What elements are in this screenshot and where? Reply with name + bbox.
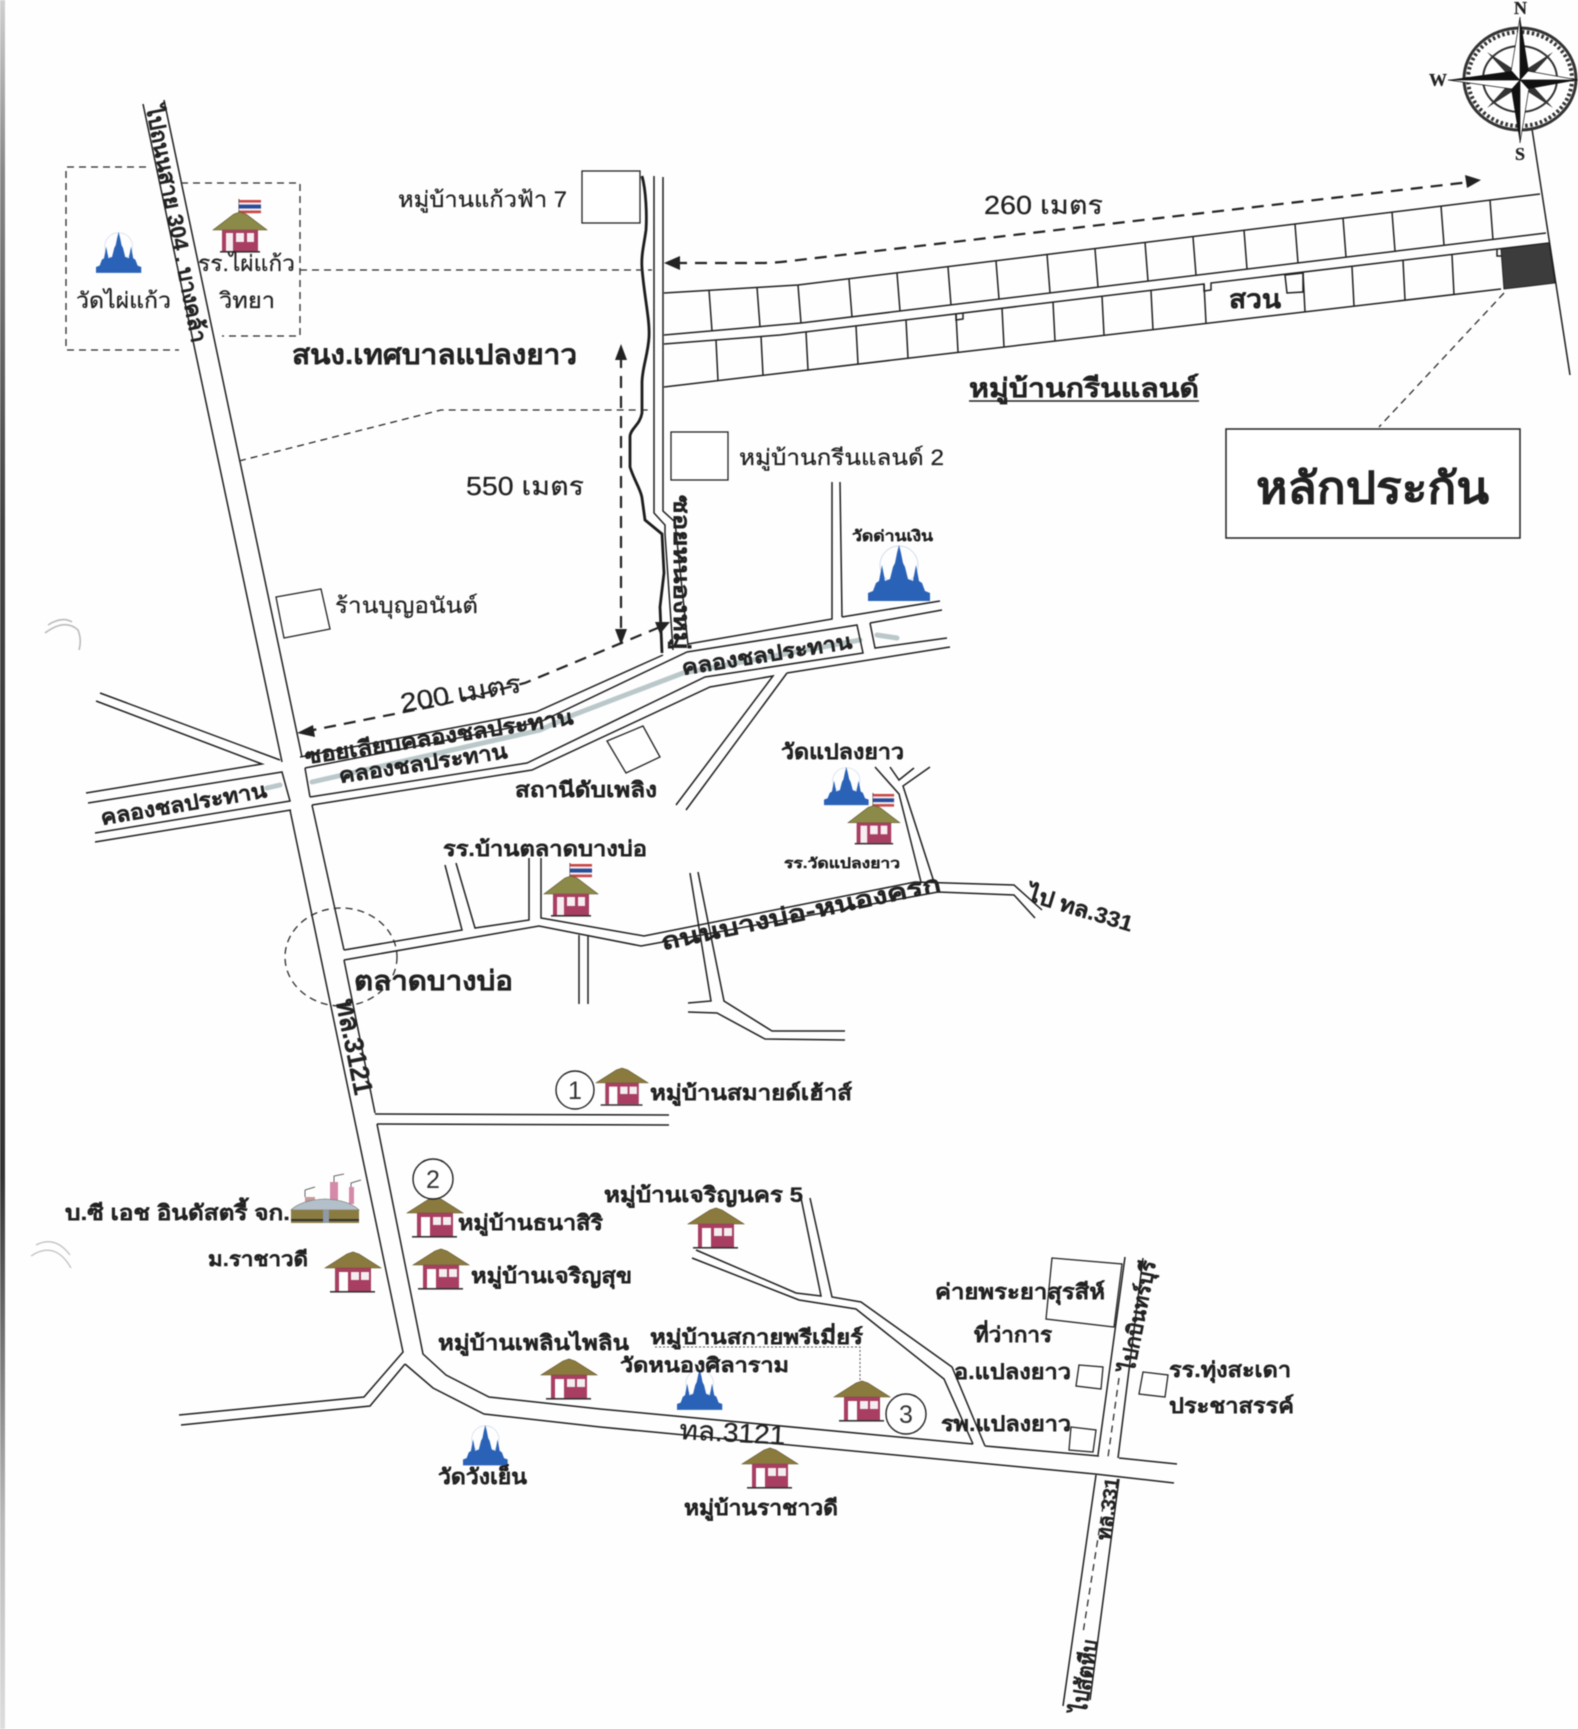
label: lower section: ประชาสรรค์: [1169, 1394, 1294, 1418]
label: canal and market section: รร.วัดแปลงยาว: [784, 855, 900, 871]
stream: [630, 176, 664, 653]
label: canal and market section: สถานีดับเพลิง: [515, 778, 657, 802]
label: canal and market section: ทล.3121: [330, 996, 379, 1097]
label: canal and market section: รร.บ้านตลาดบางบ่อ: [443, 837, 647, 861]
label: canal and market section: ตลาดบางบ่อ: [354, 966, 513, 996]
label: lower section: หมู่บ้านธนาสิริ: [458, 1211, 604, 1237]
numbered markers: 2: [426, 1166, 440, 1194]
arrow: 260 metres: [664, 175, 1481, 270]
label: lower section: หมู่บ้านเพลินไพลิน: [438, 1330, 630, 1357]
icon: school Wat Plaeng Yao: [848, 793, 900, 844]
label: lower section: ม.ราชาวดี: [208, 1248, 308, 1271]
label: lower section: หมู่บ้านราชาวดี: [684, 1496, 838, 1522]
east boundary road: [1528, 103, 1570, 375]
label: upper section: ร้านบุญอนันต์: [335, 593, 478, 619]
icon: house Rachawadi west: [325, 1252, 381, 1293]
label: canal and market section: วัดแปลงยาว: [781, 741, 904, 764]
icon: house Charoen Suk: [413, 1249, 469, 1290]
fork road to wat: [875, 767, 934, 882]
north-west branch and west canal road: [86, 693, 291, 842]
numbered markers: [413, 1071, 926, 1434]
compass rose: [1429, 0, 1578, 164]
label: lower section: ที่ว่าการ: [974, 1319, 1053, 1347]
label: lower section: บ.ซี เอช อินดัสตรี้ จก.: [65, 1197, 290, 1225]
label: lower section: รร.ทุ่งสะเดา: [1169, 1359, 1291, 1384]
label: canal and market section: ไปถนนสาย 304 . บางคล้า: [141, 101, 213, 345]
label: lower section: หมู่บ้านสมายด์เฮ้าส์: [650, 1081, 852, 1107]
main road 3121: [143, 100, 1177, 1483]
label: lower section: วัดหนองศิลาราม: [620, 1355, 789, 1377]
label: lower section: ไปกบินทร์บุรี: [1114, 1258, 1163, 1376]
label: lower section: หมู่บ้านเจริญนคร 5: [604, 1183, 803, 1209]
icon: temple Wat Dan Ngoen: [868, 545, 930, 601]
label: upper section: สนง.เทศบาลแปลงยาว: [292, 339, 577, 370]
market road: [344, 858, 1042, 1040]
icon: temple Wat Plaeng Yao: [824, 767, 869, 805]
label: canal and market section: ซอยเลียบคลองชลประทาน: [303, 705, 575, 769]
label: lower section: หมู่บ้านสกายพรีเมี่ยร์: [650, 1322, 863, 1351]
collateral callout box: [1226, 429, 1520, 538]
icon: house Charoen Nakhon: [688, 1208, 744, 1249]
numbered markers: 1: [568, 1077, 582, 1105]
canal water: [267, 635, 897, 788]
label: canal and market section: ถนนบางบ่อ-หนองครก: [659, 870, 943, 955]
label: upper section: วัดไผ่แก้ว: [76, 288, 171, 313]
icon: temple Wat Wang Yen: [463, 1425, 508, 1465]
small box in garden: [1285, 273, 1303, 293]
icon: temple Wat Phai Kaeo: [96, 232, 141, 273]
icon: house Thanasiri: [407, 1197, 463, 1238]
label: canal and market section: คลองชลประทาน: [99, 779, 269, 830]
icon: temple Wat Nong Sila: [677, 1369, 722, 1410]
label: lower section: วัดวังเย็น: [438, 1463, 528, 1489]
label: lower section: อ.แปลงยาว: [954, 1361, 1071, 1384]
label: lower section: หมู่บ้านเจริญสุข: [471, 1264, 632, 1290]
side road north: [654, 176, 688, 650]
collateral plot: [1501, 243, 1555, 289]
label: canal and market section: [99, 101, 1136, 1097]
plot dividers lower row: [716, 255, 1454, 381]
icon: house Rachawadi south: [742, 1448, 798, 1489]
collateral callout box: หลักประกัน: [1256, 464, 1489, 513]
label: lower section: [65, 1081, 1294, 1717]
arrow: 200 metres: [297, 622, 670, 737]
label: upper section: 550 เมตร: [466, 471, 584, 501]
icon: factory: [291, 1174, 361, 1223]
arrow: 550 metres: [615, 344, 627, 645]
plot rows: [664, 194, 1549, 387]
plot dividers upper row: [709, 200, 1493, 331]
label: upper section: 260 เมตร: [984, 190, 1103, 220]
icon: school Phai Kaeo: [213, 199, 267, 253]
label: lower section: ทล.331: [1093, 1476, 1124, 1542]
label: upper section: หมู่บ้านกรีนแลนด์ 2: [739, 445, 944, 471]
compass rose: S: [1515, 144, 1525, 164]
landmark boxes: [276, 171, 1168, 1452]
village road south: [375, 1114, 985, 1446]
label: canal and market section: คลองชลประทาน: [680, 630, 854, 680]
label: canal and market section: ไป ทล.331: [1022, 879, 1136, 937]
icon: house Ploen Phlin: [541, 1359, 597, 1400]
label: lower section: ไปสัตหีบ: [1065, 1638, 1103, 1717]
label: upper section: หมู่บ้านกรีนแลนด์: [969, 373, 1199, 405]
north-south road 331: [1063, 1257, 1143, 1706]
map labels: [65, 101, 1294, 1717]
label: lower section: ค่ายพระยาสุรสีห์: [935, 1280, 1105, 1306]
label: upper section: วิทยา: [218, 288, 275, 313]
canal side road east: [300, 482, 950, 810]
housing estate plots: [664, 194, 1555, 387]
label: upper section: หมู่บ้านแก้วฟ้า 7: [398, 187, 567, 213]
label: upper section: วัดด่านเงิน: [852, 527, 934, 545]
label: lower section: ทล.3121: [679, 1415, 786, 1451]
label: canal and market section: คลองชลประทาน: [337, 740, 510, 788]
label: canal and market section: ซอยหนองหมู่: [667, 495, 694, 650]
label: canal and market section: 200 เมตร: [398, 668, 523, 718]
icon: house Smart House: [596, 1068, 648, 1106]
compass rose: W: [1429, 70, 1447, 90]
numbered markers: 3: [899, 1401, 913, 1429]
icon: school Ban Talat: [544, 863, 598, 917]
label: lower section: รพ.แปลงยาว: [941, 1413, 1071, 1436]
label: upper section: สวน: [1229, 284, 1281, 314]
dashed site boundaries: [66, 167, 1504, 1381]
label: upper section: รร.ไผ่แก้ว: [198, 251, 295, 276]
label: upper section: [76, 187, 1281, 619]
icon: house Sky Premier: [834, 1381, 890, 1422]
